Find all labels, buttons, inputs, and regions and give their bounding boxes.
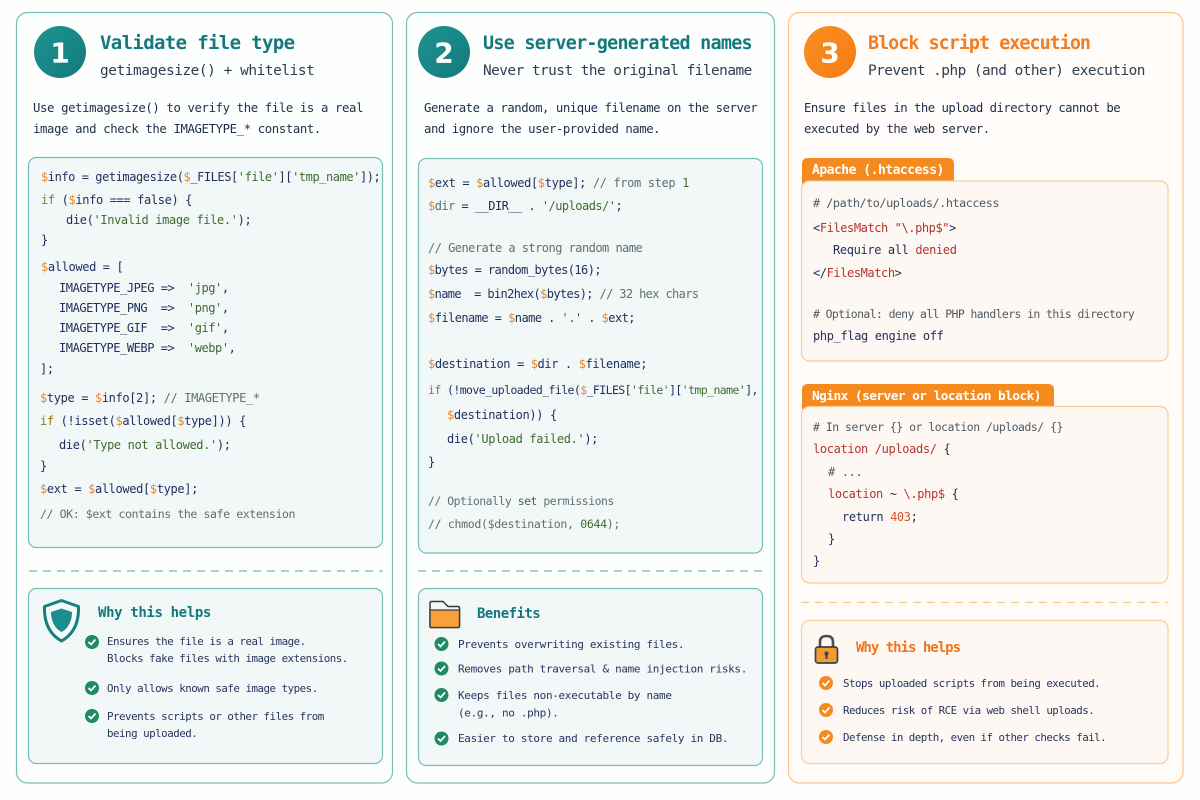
code block: getimagesize validation: // OK: $ext contains the safe extension xyxy=(40,507,295,521)
code block: getimagesize validation: die('Invalid image file.'); xyxy=(66,213,251,227)
benefit list: Prevents scripts or other files from xyxy=(107,710,324,723)
code block: apache htaccess: Apache (.htaccess) xyxy=(812,163,944,178)
description text xyxy=(33,101,363,136)
subheading: Never trust the original filename xyxy=(483,63,752,79)
code block: nginx location: # In server {} or location /uploads/ {} xyxy=(813,420,1063,434)
description text xyxy=(804,101,1120,136)
heading: block script execution: Block script execution xyxy=(868,33,1090,54)
panel: step 1 validate file type xyxy=(16,12,392,783)
code block: nginx location: } xyxy=(828,532,835,546)
description text: Use getimagesize() to verify the file is a real xyxy=(33,101,363,115)
heading: validate file type: Validate file type xyxy=(100,32,295,54)
code block: getimagesize validation: IMAGETYPE_GIF => 'gif', xyxy=(59,321,229,335)
step number badge 3 xyxy=(804,26,856,78)
code block: getimagesize validation: if (!isset($allowed[$type])) { xyxy=(40,414,246,428)
code block: getimagesize validation: } xyxy=(41,233,48,247)
benefit list: Removes path traversal & name injection risks. xyxy=(458,662,747,676)
icon: padlock xyxy=(816,636,838,663)
code block: getimagesize validation: $ext = $allowed[$type]; xyxy=(40,482,198,496)
code block: random filename xyxy=(418,158,762,553)
code block: apache htaccess: <FilesMatch "\.php$"> xyxy=(813,221,956,235)
benefit list xyxy=(819,676,1106,744)
code block: getimagesize validation: IMAGETYPE_JPEG => 'jpg', xyxy=(59,281,229,295)
panel: why this helps (step 3) xyxy=(802,620,1168,764)
benefit list: Reduces risk of RCE via web shell uploads. xyxy=(843,704,1094,717)
code block: random filename: $ext = $allowed[$type]; // from step 1 xyxy=(428,176,689,190)
code block: nginx location: Nginx (server or location block) xyxy=(812,389,1041,404)
panel: benefits xyxy=(418,588,762,766)
panel: step 2 server-generated names xyxy=(406,12,774,783)
description text: Generate a random, unique filename on the server xyxy=(424,101,757,115)
code block: random filename: // Generate a strong random name xyxy=(428,241,643,255)
code block: random filename: // Optionally set permissions xyxy=(428,494,614,508)
heading: why this helps: Why this helps xyxy=(856,640,961,656)
code block: getimagesize validation: IMAGETYPE_WEBP => 'webp', xyxy=(59,341,235,355)
step number badge 2: 2 xyxy=(434,36,454,70)
description text: executed by the web server. xyxy=(804,122,990,136)
description text: Ensure files in the upload directory cannot be xyxy=(804,101,1120,115)
step number badge 2 xyxy=(418,26,470,78)
code block: random filename: if (!move_uploaded_file($_FILES['file']['tmp_name'], xyxy=(428,383,758,397)
code block: getimagesize validation: $allowed = [ xyxy=(41,260,123,274)
code block: getimagesize validation: $type = $info[2]; // IMAGETYPE_* xyxy=(40,391,260,405)
code block: apache htaccess: </FilesMatch> xyxy=(813,266,902,280)
code block: nginx location: # ... xyxy=(828,465,862,479)
code block: random filename: $bytes = random_bytes(16); xyxy=(428,263,601,277)
code block: getimagesize validation: die('Type not allowed.'); xyxy=(59,438,231,452)
step number badge 3: 3 xyxy=(820,36,840,70)
code block: apache htaccess xyxy=(802,158,1168,361)
code block: nginx location: return 403; xyxy=(842,510,918,524)
description text xyxy=(424,101,757,136)
code block: nginx location xyxy=(802,384,1168,583)
heading: why this helps: Why this helps xyxy=(98,605,211,621)
subheading: Prevent .php (and other) execution xyxy=(868,63,1145,79)
code block: getimagesize validation: IMAGETYPE_PNG => 'png', xyxy=(59,301,229,315)
code block: getimagesize validation xyxy=(28,158,382,548)
description text: image and check the IMAGETYPE_* constant. xyxy=(33,122,321,136)
code block: random filename: $filename = $name . '.' . $ext; xyxy=(428,311,635,325)
benefit list: Defense in depth, even if other checks fail. xyxy=(843,731,1106,744)
code block: apache htaccess: # Optional: deny all PHP handlers in this directory xyxy=(813,307,1135,321)
description text: and ignore the user-provided name. xyxy=(424,122,660,136)
benefit list: Easier to store and reference safely in DB. xyxy=(458,732,728,745)
code block: nginx location: } xyxy=(813,554,820,568)
icon: folder xyxy=(430,602,460,628)
panel: why this helps (step 1) xyxy=(28,588,382,764)
code block: getimagesize validation: if ($info === false) { xyxy=(41,193,192,207)
icon: shield xyxy=(44,600,79,641)
step number badge 1 xyxy=(34,26,86,78)
benefit list: (e.g., no .php). xyxy=(458,706,559,720)
code block: random filename: // chmod($destination, 0644); xyxy=(428,517,620,531)
heading: benefits: Benefits xyxy=(477,606,540,622)
code block: nginx location: location /uploads/ { xyxy=(813,442,950,456)
benefit list: Keeps files non-executable by name xyxy=(458,689,672,702)
code block: random filename: $name = bin2hex($bytes); // 32 hex chars xyxy=(428,287,699,301)
code block: getimagesize validation: ]; xyxy=(40,362,54,376)
subheading: getimagesize() + whitelist xyxy=(100,63,314,79)
code block: nginx location: location ~ \.php$ { xyxy=(828,487,958,501)
code block: getimagesize validation: } xyxy=(40,459,47,473)
benefit list: Only allows known safe image types. xyxy=(107,682,318,695)
code block: random filename: } xyxy=(428,455,435,469)
code block: random filename: $dir = __DIR__ . '/uploads/'; xyxy=(428,199,622,213)
code block: getimagesize validation: $info = getimagesize($_FILES['file']['tmp_name']); xyxy=(41,170,380,184)
code block: random filename: $destination)) { xyxy=(447,408,557,422)
heading: use server-generated names: Use server-generated names xyxy=(483,33,752,54)
benefit list: Blocks fake files with image extensions. xyxy=(107,652,348,665)
benefit list xyxy=(85,635,348,740)
benefit list: Ensures the file is a real image. xyxy=(107,635,306,648)
benefit list: Stops uploaded scripts from being executed. xyxy=(843,677,1100,690)
panel: step 3 block script execution xyxy=(788,12,1183,783)
benefit list: being uploaded. xyxy=(107,727,197,740)
code block: apache htaccess: php_flag engine off xyxy=(813,329,944,343)
benefit list xyxy=(434,637,747,746)
benefit list: Prevents overwriting existing files. xyxy=(458,638,684,651)
code block: apache htaccess: Require all denied xyxy=(833,243,957,257)
code block: random filename: $destination = $dir . $filename; xyxy=(428,357,647,371)
step number badge 1: 1 xyxy=(50,36,70,70)
code block: random filename: die('Upload failed.'); xyxy=(447,432,598,446)
code block: apache htaccess: # /path/to/uploads/.htaccess xyxy=(813,196,999,210)
